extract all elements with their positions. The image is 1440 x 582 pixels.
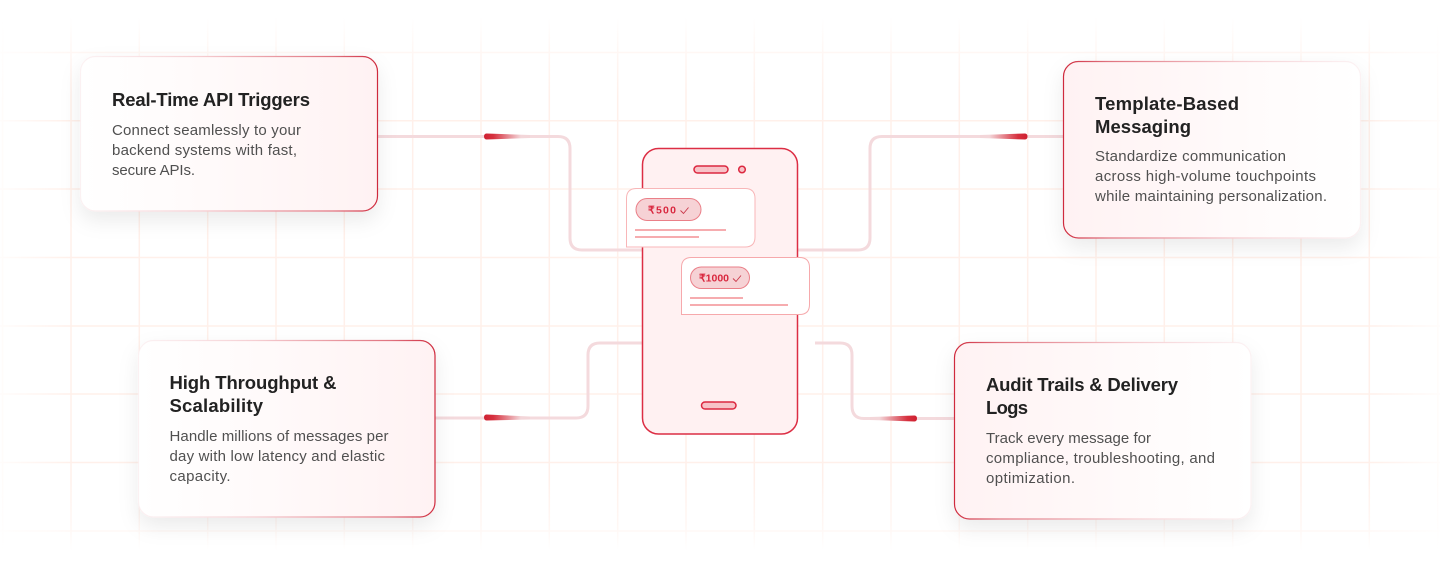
panel: High Throughput and Scalability xyxy=(138,340,435,517)
heading: Real-Time API Triggers: Real-Time API Triggers xyxy=(112,89,310,110)
text: throughput description: day with low latency and elastic xyxy=(170,448,386,465)
heading: Audit Trails and Delivery Logs: Logs xyxy=(986,397,1028,418)
text: throughput description: capacity. xyxy=(170,468,230,485)
connector: template messaging to phone xyxy=(798,136,1063,250)
heading: High Throughput and Scalability: High Throughput & xyxy=(170,372,336,393)
message bubble: 500 rupees xyxy=(626,188,755,247)
arrow pulse: top left xyxy=(484,134,530,140)
heading: Template-Based Messaging xyxy=(1095,93,1239,137)
panel: Template-Based Messaging xyxy=(1064,62,1360,238)
connector: phone to audit logs xyxy=(815,343,954,418)
pill: 500 rupees confirmed: ₹500 xyxy=(648,204,676,216)
text: audit trails description: optimization. xyxy=(986,470,1075,487)
icon: phone xyxy=(642,148,798,434)
text: audit trails description xyxy=(986,430,1215,487)
phone speaker xyxy=(694,166,728,173)
text: throughput description: Handle millions of messages per xyxy=(170,428,388,445)
text: template messaging description: Standardize communication xyxy=(1095,148,1286,165)
text: template messaging description: while maintaining personalization. xyxy=(1094,188,1327,205)
panel: Audit Trails and Delivery Logs xyxy=(954,342,1251,519)
message bubble: 1000 rupees xyxy=(682,258,810,314)
arrow pulse: bottom left xyxy=(484,414,530,420)
phone home button xyxy=(702,402,736,409)
arrow pulse: top right xyxy=(980,134,1028,140)
text: audit trails description: compliance, troubleshooting, and xyxy=(986,450,1215,467)
heading: Template-Based Messaging: Messaging xyxy=(1095,116,1191,137)
heading: Audit Trails and Delivery Logs: Audit Trails & Delivery xyxy=(986,374,1179,395)
text: template messaging description xyxy=(1094,148,1327,205)
text: API triggers description xyxy=(112,122,301,179)
arrow pulse: bottom right xyxy=(870,416,917,422)
text: API triggers description: backend systems with fast, xyxy=(112,142,297,159)
heading: Template-Based Messaging: Template-Based xyxy=(1095,93,1239,114)
heading: Audit Trails and Delivery Logs xyxy=(986,374,1179,418)
heading: High Throughput and Scalability: Scalability xyxy=(170,395,264,416)
connector: API triggers to phone xyxy=(378,136,642,250)
panel: Real-Time API Triggers xyxy=(80,56,378,211)
heading: High Throughput and Scalability xyxy=(170,372,336,416)
text: throughput description xyxy=(170,428,388,485)
pill: 1000 rupees confirmed: ₹1000 xyxy=(699,272,729,284)
text: template messaging description: across high-volume touchpoints xyxy=(1095,168,1316,185)
text: API triggers description: secure APIs. xyxy=(112,162,195,179)
text: audit trails description: Track every message for xyxy=(986,430,1151,447)
phone camera xyxy=(739,166,745,173)
connector: throughput to phone xyxy=(435,343,642,418)
text: API triggers description: Connect seamlessly to your xyxy=(112,122,301,139)
